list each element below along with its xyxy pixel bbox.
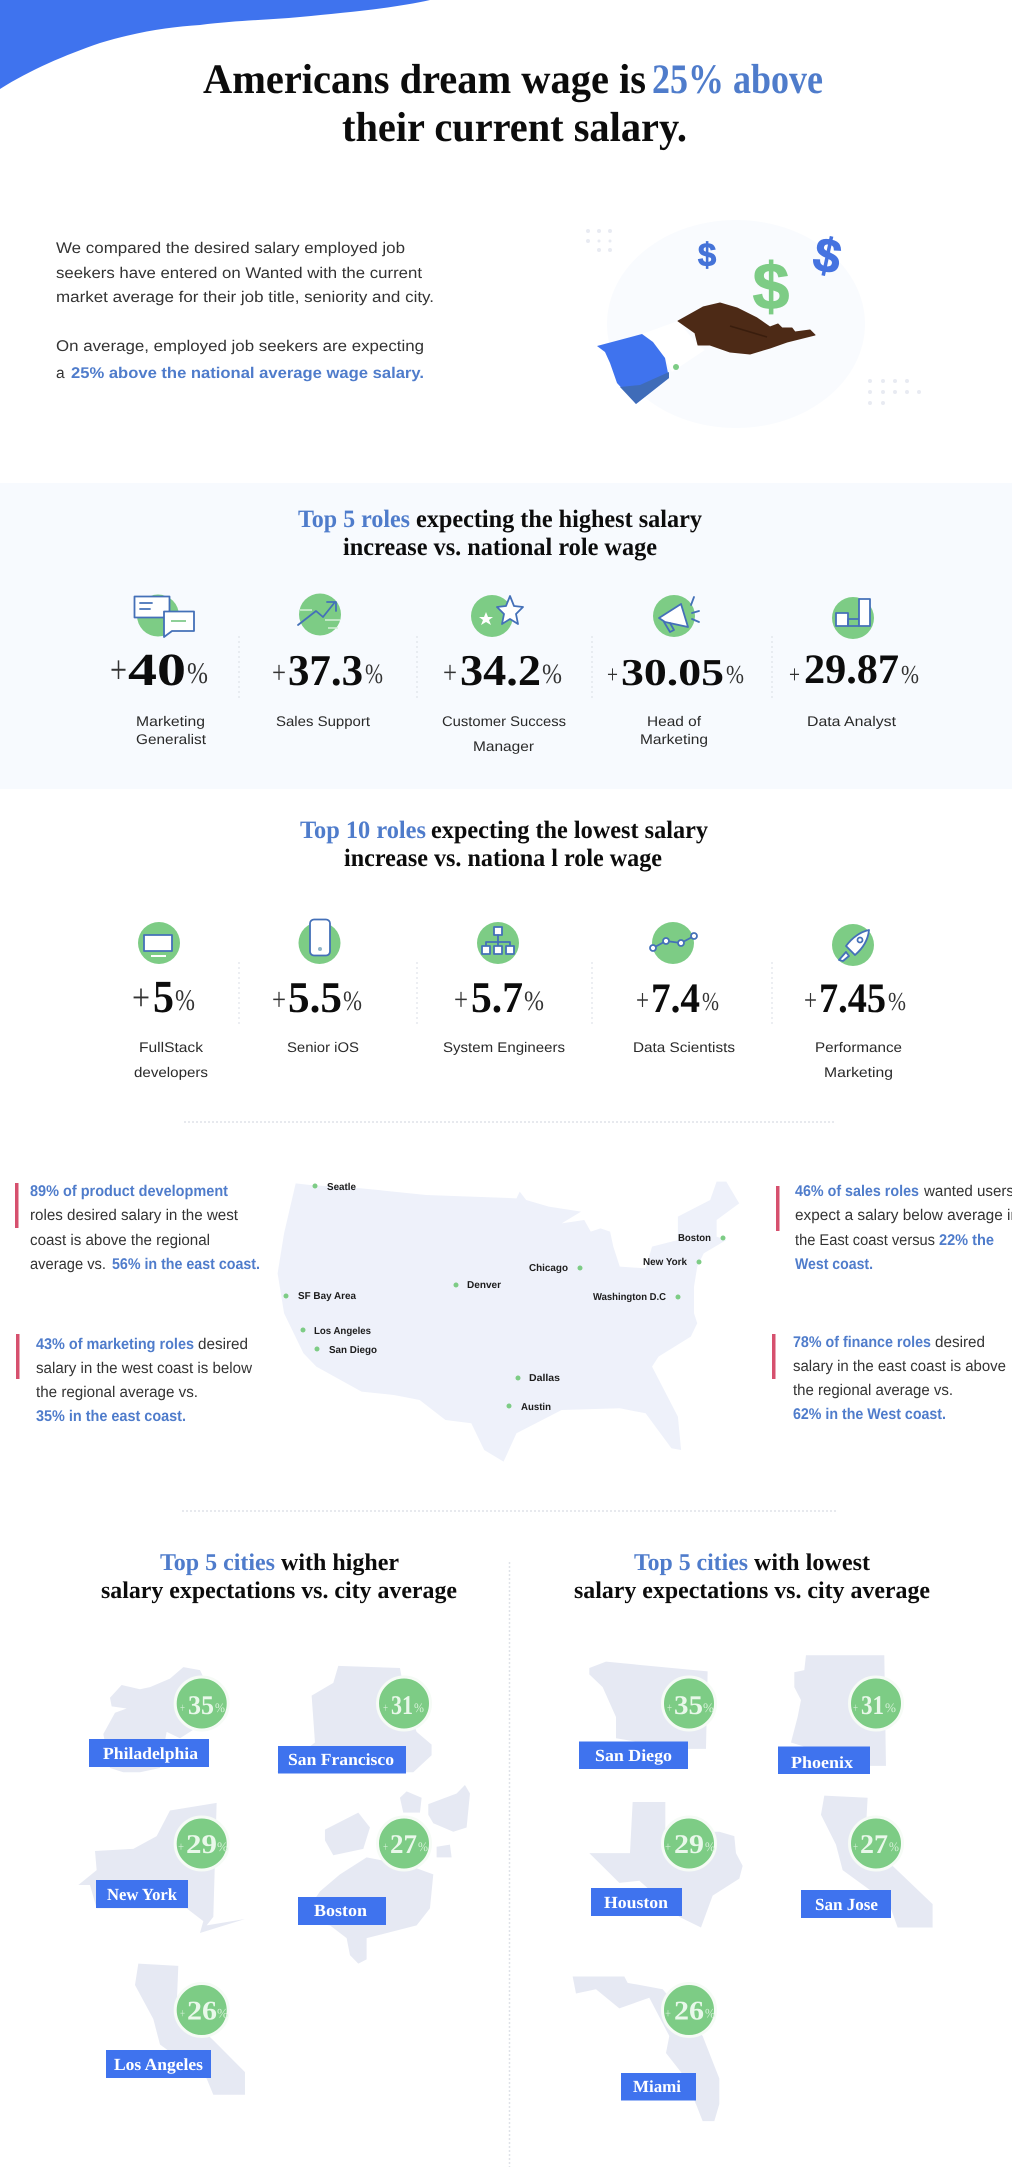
illustration: hand with dollars [586, 220, 921, 428]
city card: San Francisco: + [383, 1700, 388, 1715]
city: Los Angeles: Los Angeles [314, 1326, 371, 1337]
city card: San Jose [801, 1796, 933, 1928]
city card: Houston [589, 1802, 743, 1928]
stat: +34.2% customer success manager: Manager [473, 738, 534, 754]
city: Dallas [516, 1373, 560, 1384]
city card: San Diego: 35 [674, 1690, 703, 1720]
stat: +7.45% performance marketing: Marketing [824, 1064, 893, 1080]
city card: Los Angeles [106, 1964, 245, 2095]
stat: +5.5% senior ios [272, 973, 362, 1055]
callout: product development: roles desired salary in the west [30, 1207, 239, 1224]
stat: +5% fullstack developers: % [175, 984, 195, 1017]
city card: Miami: 26 [674, 1996, 704, 2026]
callout: marketing roles: the regional average vs. [36, 1384, 198, 1401]
intro text block: 25% above the national average wage salary. [71, 365, 424, 382]
callout: finance roles: 62% in the West coast. [793, 1406, 946, 1423]
city card: San Francisco: San Francisco [288, 1750, 394, 1769]
stat: +30.05% head of marketing: Head of [647, 713, 701, 729]
stat: +5% fullstack developers: FullStack [139, 1039, 204, 1055]
stat: +37.3% sales support: 37.3 [288, 646, 363, 695]
city card: Phoenix: + [853, 1700, 858, 1715]
city: Seatle [312, 1182, 356, 1193]
callout: sales roles: 46% of sales roles [795, 1183, 919, 1200]
callout: sales roles: 22% the [939, 1232, 994, 1249]
intro text block [56, 240, 434, 382]
city card: Houston: Houston [604, 1893, 669, 1912]
heading: top 5 roles [298, 506, 702, 561]
stat: +7.45% performance marketing: + [804, 984, 817, 1017]
callout: product development [15, 1183, 260, 1273]
stat: +40% marketing generalist [110, 644, 208, 747]
us map [278, 1182, 739, 1462]
city card: San Francisco [277, 1666, 432, 1774]
stat: +5.5% senior ios: % [343, 986, 362, 1017]
city card: Los Angeles: + [180, 2006, 185, 2020]
callout: finance roles: desired [935, 1334, 985, 1351]
callout: finance roles: the regional average vs. [793, 1382, 953, 1399]
stat: +29.87% data analyst: % [901, 660, 919, 689]
stat: +37.3% sales support: Sales Support [276, 713, 370, 729]
city card: Los Angeles: Los Angeles [114, 2055, 203, 2074]
stat: +29.87% data analyst: 29.87 [804, 647, 899, 693]
icon: rocket [832, 924, 874, 966]
stat: +7.45% performance marketing: % [888, 987, 906, 1016]
city card: Boston: % [418, 1839, 428, 1854]
callout: marketing roles: desired [198, 1336, 248, 1353]
city card: Philadelphia: Philadelphia [103, 1744, 199, 1763]
icon: trend arrow [298, 594, 341, 636]
stat: +40% marketing generalist: 40 [128, 644, 186, 695]
stat: +5.5% senior ios: + [272, 981, 286, 1017]
city card: San Jose: % [889, 1839, 899, 1854]
stat: +5.5% senior ios: Senior iOS [287, 1039, 359, 1055]
stat: +29.87% data analyst [789, 647, 919, 729]
intro text block: We compared the desired salary employed job [56, 240, 405, 257]
icon: laptop [138, 922, 180, 964]
heading: lowest cities: salary expectations vs. city average [574, 1578, 930, 1604]
callout: marketing roles: 43% of marketing roles [36, 1336, 194, 1353]
stat: +5% fullstack developers [132, 971, 208, 1080]
city: Boston: Boston [678, 1233, 711, 1244]
stat: +7.4% data scientists: % [702, 987, 719, 1016]
city card: New York: 29 [186, 1829, 217, 1859]
city card: San Jose: 27 [860, 1829, 888, 1859]
stat: +40% marketing generalist: + [110, 647, 127, 692]
city card: Miami: % [705, 2006, 715, 2020]
callout: finance roles [772, 1334, 1006, 1423]
city: Seatle: Seatle [327, 1182, 356, 1193]
stat: +7.4% data scientists: + [636, 984, 649, 1017]
stat: +7.4% data scientists [633, 976, 735, 1055]
city card: Boston: 27 [390, 1829, 417, 1859]
city card: Boston [298, 1785, 470, 1964]
stat: +7.45% performance marketing: 7.45 [819, 976, 886, 1022]
stat: +37.3% sales support: % [365, 659, 383, 690]
blue corner wave [0, 0, 430, 89]
callout: product development: 89% of product development [30, 1183, 228, 1200]
stat: +5.7% system engineers: System Engineers [443, 1039, 565, 1055]
city: Washington D.C: Washington D.C [593, 1292, 666, 1303]
city card: Phoenix: 31 [861, 1690, 884, 1720]
stat: +5.7% system engineers: % [524, 986, 544, 1017]
city: Austin [506, 1402, 551, 1413]
city card: Philadelphia [89, 1667, 228, 1772]
stat: +34.2% customer success manager: Customer Success [442, 713, 566, 729]
city: Denver: Denver [467, 1280, 501, 1291]
callout: marketing roles: salary in the west coast is below [36, 1360, 253, 1377]
icon: megaphone [653, 595, 699, 637]
city card: Houston: % [705, 1839, 715, 1854]
illustration: hand with dollars: $ [753, 249, 789, 323]
stat: +5.5% senior ios: 5.5 [288, 973, 342, 1022]
city card: Philadelphia: % [215, 1700, 225, 1715]
stat: +40% marketing generalist: Marketing [136, 713, 205, 729]
city card: Philadelphia: + [180, 1700, 185, 1715]
city card: New York: New York [107, 1885, 178, 1904]
stat: +34.2% customer success manager: 34.2 [460, 646, 541, 695]
stat: +5.7% system engineers: + [454, 981, 468, 1017]
stat: +34.2% customer success manager: + [443, 654, 457, 690]
heading: top 10 roles: expecting the lowest salary [431, 817, 708, 844]
stat: +37.3% sales support: + [272, 654, 286, 690]
city card: San Diego: + [667, 1700, 672, 1715]
stat: +34.2% customer success manager: % [542, 659, 562, 690]
stat: +30.05% head of marketing: % [726, 660, 744, 689]
stat: +29.87% data analyst: Data Analyst [807, 713, 896, 729]
city card: San Francisco: 31 [391, 1690, 413, 1720]
city: Dallas: Dallas [529, 1373, 560, 1384]
city card: Los Angeles: % [217, 2006, 228, 2020]
stat: +29.87% data analyst: + [789, 660, 800, 689]
city card: New York [78, 1803, 245, 1933]
title [203, 57, 823, 151]
callout: sales roles: West coast. [795, 1256, 873, 1273]
heading: lowest cities: Top 5 cities [634, 1550, 748, 1576]
city card: San Jose: + [853, 1839, 858, 1854]
stat: +5.7% system engineers: 5.7 [471, 973, 523, 1022]
city card: San Francisco: % [414, 1700, 424, 1715]
stat: +40% marketing generalist: Generalist [136, 731, 206, 747]
stat: +30.05% head of marketing: Marketing [640, 731, 708, 747]
stat: +5.7% system engineers [443, 973, 565, 1055]
stat: +30.05% head of marketing: + [607, 660, 618, 689]
callout: product development: 56% in the east coast. [112, 1256, 260, 1273]
icon: chat bubbles [134, 594, 194, 637]
icon: stars [471, 595, 523, 637]
heading: top 5 roles: increase vs. national role wage [343, 534, 657, 561]
intro text block: seekers have entered on Wanted with the current [56, 265, 423, 282]
city card: Houston: + [665, 1839, 671, 1854]
stat: +7.45% performance marketing [804, 976, 906, 1080]
heading: lowest cities [574, 1550, 930, 1604]
stat: +7.4% data scientists: Data Scientists [633, 1039, 735, 1055]
stat: +40% marketing generalist: % [187, 657, 208, 690]
city card: Miami [573, 1976, 719, 2121]
icon: line chart [650, 922, 697, 964]
heading: higher cities: with higher [281, 1550, 399, 1576]
heading: top 5 roles: expecting the highest salary [416, 506, 702, 533]
stat: +34.2% customer success manager [442, 646, 566, 754]
city card: Boston: Boston [314, 1901, 368, 1920]
city: New York: New York [643, 1257, 687, 1268]
intro text block: On average, employed job seekers are expecting [56, 338, 424, 355]
city card: San Diego: % [703, 1700, 714, 1715]
callout: product development: average vs. [30, 1256, 106, 1273]
panel: top 10 roles lowest [132, 817, 906, 1080]
callout: finance roles: salary in the east coast is above [793, 1358, 1006, 1375]
stat: +7.4% data scientists: 7.4 [651, 976, 700, 1022]
panel: top 5 roles highest [0, 483, 1012, 789]
callout: sales roles: the East coast versus [795, 1232, 935, 1249]
intro text block: market average for their job title, seniority and city. [56, 289, 434, 306]
city card: Los Angeles: 26 [187, 1996, 217, 2026]
heading: top 10 roles: increase vs. nationa l role wage [344, 845, 662, 872]
city card: Boston: + [383, 1839, 388, 1854]
city card: Phoenix: Phoenix [791, 1753, 854, 1772]
city card: New York: % [217, 1839, 228, 1854]
city: Chicago: Chicago [529, 1263, 568, 1274]
icon: smartphone [298, 920, 340, 964]
illustration: hand with dollars: $ [809, 228, 846, 285]
heading: top 10 roles [300, 817, 708, 872]
heading: higher cities: Top 5 cities [160, 1550, 275, 1576]
city card: Houston: 29 [674, 1829, 704, 1859]
callout: sales roles [776, 1183, 1012, 1273]
city: Austin: Austin [521, 1402, 551, 1413]
icon: org chart [477, 922, 519, 964]
callout: marketing roles [16, 1334, 253, 1425]
stat: +5% fullstack developers: + [132, 977, 150, 1019]
intro text block: a [56, 365, 65, 382]
heading: top 5 roles: Top 5 roles [298, 506, 410, 533]
city card: San Diego [579, 1662, 716, 1769]
icon: bar chart [832, 597, 874, 639]
title: Americans dream wage is [203, 57, 646, 103]
heading: higher cities [101, 1550, 457, 1604]
city card: San Jose: San Jose [815, 1895, 878, 1914]
city card: Phoenix [778, 1655, 902, 1774]
stat: +30.05% head of marketing [607, 652, 744, 747]
heading: lowest cities: with lowest [754, 1550, 870, 1576]
stat: +5% fullstack developers: 5 [153, 971, 174, 1022]
title: 25% above [652, 57, 823, 103]
callout: marketing roles: 35% in the east coast. [36, 1408, 186, 1425]
heading: top 10 roles: Top 10 roles [300, 817, 426, 844]
city: SF Bay Area: SF Bay Area [298, 1291, 356, 1302]
illustration: hand with dollars: $ [698, 236, 716, 273]
stat: +30.05% head of marketing: 30.05 [621, 652, 724, 694]
title: their current salary. [342, 105, 687, 151]
city card: San Diego: San Diego [595, 1746, 672, 1765]
callout: product development: coast is above the regional [30, 1232, 210, 1249]
city card: Miami: + [665, 2006, 671, 2020]
city card: Miami: Miami [633, 2077, 681, 2096]
heading: higher cities: salary expectations vs. city average [101, 1578, 457, 1604]
city card: Philadelphia: 35 [188, 1690, 214, 1720]
stat: +37.3% sales support [272, 646, 383, 729]
city card: New York: + [178, 1839, 184, 1854]
city: San Diego: San Diego [329, 1345, 377, 1356]
stat: +5% fullstack developers: developers [134, 1064, 208, 1080]
stat: +7.45% performance marketing: Performance [815, 1039, 902, 1055]
callout: finance roles: 78% of finance roles [793, 1334, 931, 1351]
city card: Phoenix: % [885, 1700, 896, 1715]
